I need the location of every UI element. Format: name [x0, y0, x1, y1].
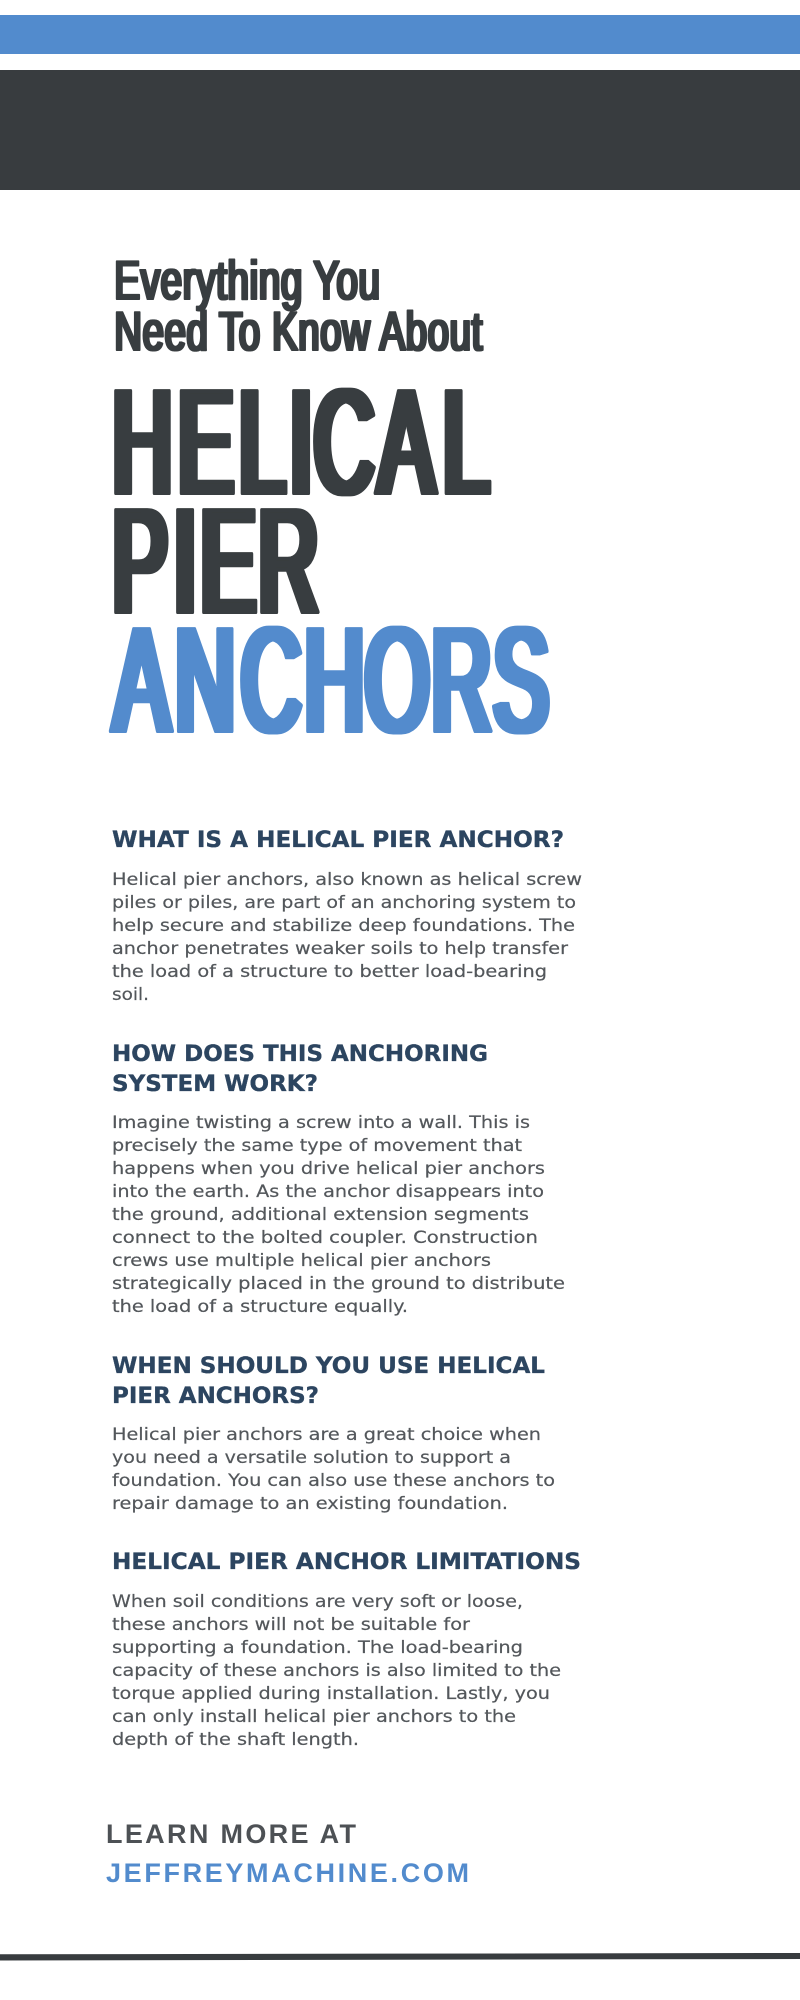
body text: crews use multiple helical pier anchors: [112, 1251, 491, 1271]
blue top band: [0, 15, 800, 54]
call to action: LEARN MORE AT: [106, 1819, 356, 1849]
body text: repair damage to an existing foundation.: [112, 1494, 508, 1514]
call to action: [106, 1819, 469, 1888]
heading: HELICAL PIER ANCHOR LIMITATIONS: [112, 1550, 581, 1575]
body text: precisely the same type of movement that: [112, 1136, 522, 1156]
body text: these anchors will not be suitable for: [112, 1615, 470, 1635]
section: when should you use helical pier anchors: [112, 1354, 555, 1514]
body text: the load of a structure equally.: [112, 1297, 408, 1317]
main title: PIER: [113, 479, 318, 644]
body text: strategically placed in the ground to distribute: [112, 1274, 565, 1294]
body text: soil.: [112, 985, 149, 1005]
main title: ANCHORS: [114, 598, 549, 763]
bottom rule: [0, 1953, 800, 1960]
heading: WHAT IS A HELICAL PIER ANCHOR?: [112, 828, 564, 853]
body text: [112, 1425, 555, 1514]
heading: WHEN SHOULD YOU USE HELICAL: [112, 1354, 545, 1379]
body text: Helical pier anchors are a great choice when: [112, 1425, 541, 1445]
body text: the load of a structure to better load-bearing: [112, 962, 547, 982]
body text: happens when you drive helical pier anchors: [112, 1159, 545, 1179]
body text: When soil conditions are very soft or loose,: [112, 1592, 523, 1612]
body text: can only install helical pier anchors to the: [112, 1707, 516, 1727]
body text: anchor penetrates weaker soils to help transfer: [112, 939, 568, 959]
body text: [112, 1113, 565, 1317]
body text: supporting a foundation. The load-bearing: [112, 1638, 523, 1658]
body text: capacity of these anchors is also limited to the: [112, 1661, 561, 1681]
body text: the ground, additional extension segments: [112, 1205, 529, 1225]
body text: help secure and stabilize deep foundations. The: [112, 916, 575, 936]
body text: into the earth. As the anchor disappears into: [112, 1182, 544, 1202]
heading: [112, 1042, 488, 1097]
body text: connect to the bolted coupler. Construction: [112, 1228, 538, 1248]
body text: you need a versatile solution to support a: [112, 1448, 511, 1468]
section: helical pier anchor limitations: [112, 1550, 581, 1750]
call to action: JEFFREYMACHINE.COM: [106, 1858, 469, 1888]
body text: piles or piles, are part of an anchoring system to: [112, 893, 576, 913]
subtitle: [114, 249, 483, 362]
heading: HOW DOES THIS ANCHORING: [112, 1042, 488, 1067]
body text: depth of the shaft length.: [112, 1730, 359, 1750]
body text: torque applied during installation. Lastly, you: [112, 1684, 550, 1704]
main title: [113, 360, 549, 763]
section: how does this anchoring system work: [112, 1042, 565, 1317]
body text: [112, 1592, 561, 1750]
body text: foundation. You can also use these anchors to: [112, 1471, 555, 1491]
main title: HELICAL: [113, 360, 489, 525]
dark header band: [0, 70, 800, 190]
body text: [112, 870, 582, 1005]
heading: SYSTEM WORK?: [112, 1072, 318, 1097]
section: what is a helical pier anchor: [112, 828, 582, 1005]
body text: Helical pier anchors, also known as helical screw: [112, 870, 582, 890]
heading: PIER ANCHORS?: [112, 1384, 319, 1409]
heading: [112, 1354, 545, 1409]
body text: Imagine twisting a screw into a wall. This is: [112, 1113, 530, 1133]
